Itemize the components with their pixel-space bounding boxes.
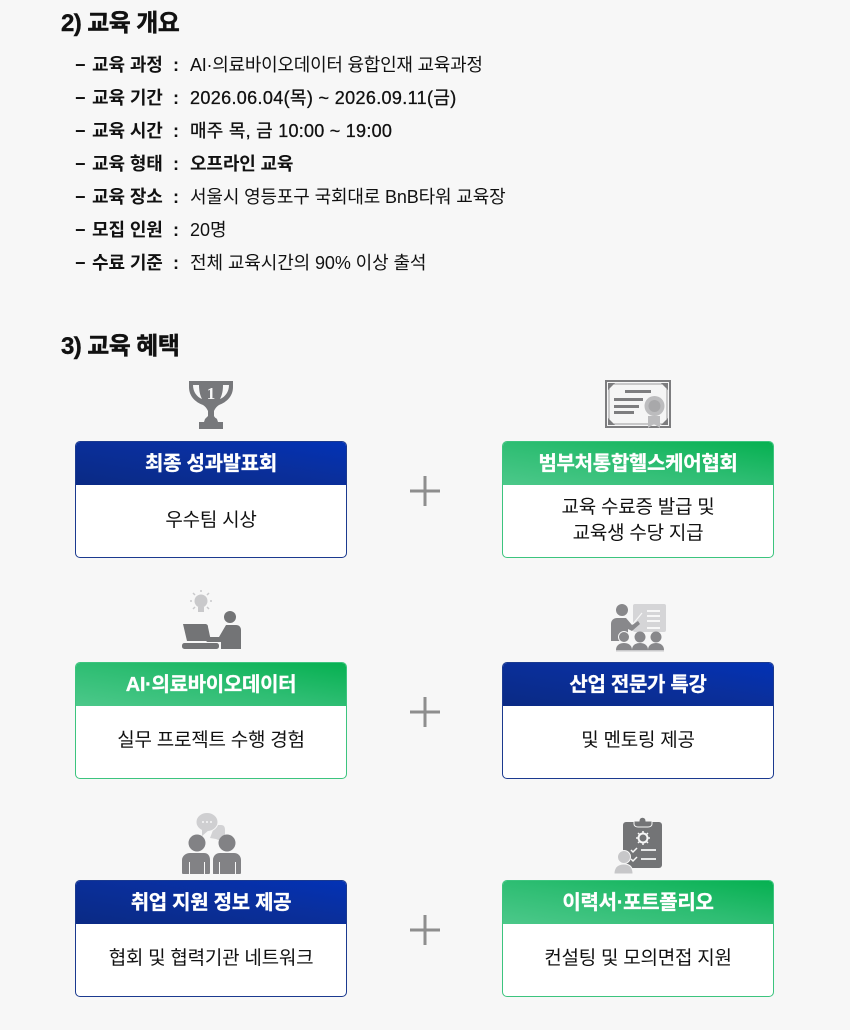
card header: 취업 지원 정보 제공 — [131, 892, 291, 914]
row: capacity: − — [75, 220, 86, 240]
card header — [502, 441, 774, 485]
icon: trophy: 1 — [207, 384, 215, 403]
heading: 3) 교육 혜택: 3) 교육 혜택 — [61, 333, 179, 360]
row: hours: 교육 시간 — [92, 121, 163, 141]
row: course name: 교육 과정 — [92, 55, 163, 75]
plus sign row 1 — [410, 476, 440, 506]
card header: 이력서·포트폴리오 — [562, 892, 714, 914]
card body — [562, 497, 714, 544]
row: capacity: 모집 인원 — [92, 220, 163, 240]
row: completion: − — [75, 253, 86, 273]
card body: 컨설팅 및 모의면접 지원 — [544, 948, 732, 969]
row: location: − — [75, 187, 86, 207]
card body: 교육생 수당 지급 — [573, 523, 703, 544]
row: course name: AI·의료바이오데이터 융합인재 교육과정 — [190, 55, 483, 75]
card header: 최종 성과발표회 — [145, 453, 277, 475]
row: format: 교육 형태 — [92, 154, 163, 174]
row: course name: : — [173, 55, 179, 75]
card header: AI·의료바이오데이터 — [126, 674, 296, 696]
row: period — [75, 88, 457, 108]
row: period: : — [173, 88, 179, 108]
card body: 우수팀 시상 — [165, 510, 257, 531]
icon: two people talking — [182, 813, 241, 874]
row: completion: 전체 교육시간의 90% 이상 출석 — [190, 253, 426, 273]
row: hours: − — [75, 121, 86, 141]
row: capacity: 20명 — [190, 220, 227, 240]
row: format: : — [173, 154, 179, 174]
row: capacity — [75, 220, 227, 240]
card header — [75, 880, 347, 924]
row: completion — [75, 253, 426, 273]
row: hours: : — [173, 121, 179, 141]
list: course overview — [75, 55, 506, 273]
row: format — [75, 154, 293, 174]
row: format: − — [75, 154, 86, 174]
card header — [75, 662, 347, 706]
card body: 실무 프로젝트 수행 경험 — [117, 730, 305, 751]
plus sign row 2 — [410, 697, 440, 727]
row: location: 교육 장소 — [92, 187, 163, 207]
card header — [75, 441, 347, 485]
row: capacity: : — [173, 220, 179, 240]
card body: 교육 수료증 발급 및 — [562, 497, 714, 518]
card body: 및 멘토링 제공 — [581, 730, 695, 751]
icon: clipboard with person — [614, 818, 662, 874]
card: AI medical bio data — [75, 662, 347, 779]
row: location: : — [173, 187, 179, 207]
row: hours — [75, 121, 392, 141]
card: industry expert lecture — [502, 662, 774, 779]
row: period: 교육 기간 — [92, 88, 163, 108]
card: employment support — [75, 880, 347, 997]
icon: trophy — [189, 381, 233, 429]
card: final presentation — [75, 441, 347, 558]
row: location: 서울시 영등포구 국회대로 BnB타워 교육장 — [190, 187, 506, 207]
row: period: − — [75, 88, 86, 108]
row: completion: : — [173, 253, 179, 273]
icon: lecturer with audience — [611, 604, 666, 652]
row: completion: 수료 기준 — [92, 253, 163, 273]
row: hours: 매주 목, 금 10:00 ~ 19:00 — [190, 121, 392, 141]
card header: 산업 전문가 특강 — [569, 674, 707, 696]
icon: person at laptop with idea — [182, 590, 241, 649]
card header — [502, 662, 774, 706]
card: resume and portfolio — [502, 880, 774, 997]
card header: 범부처통합헬스케어협회 — [538, 453, 738, 475]
card: certificate and allowance — [502, 441, 774, 558]
icon: certificate — [605, 380, 671, 428]
card header — [502, 880, 774, 924]
row: format: 오프라인 교육 — [190, 154, 293, 174]
row: course name: − — [75, 55, 86, 75]
heading: 2) 교육 개요: 2) 교육 개요 — [61, 10, 179, 37]
row: period: 2026.06.04(목) ~ 2026.09.11(금) — [190, 88, 457, 108]
plus sign row 3 — [410, 915, 440, 945]
card body: 협회 및 협력기관 네트워크 — [109, 948, 313, 969]
